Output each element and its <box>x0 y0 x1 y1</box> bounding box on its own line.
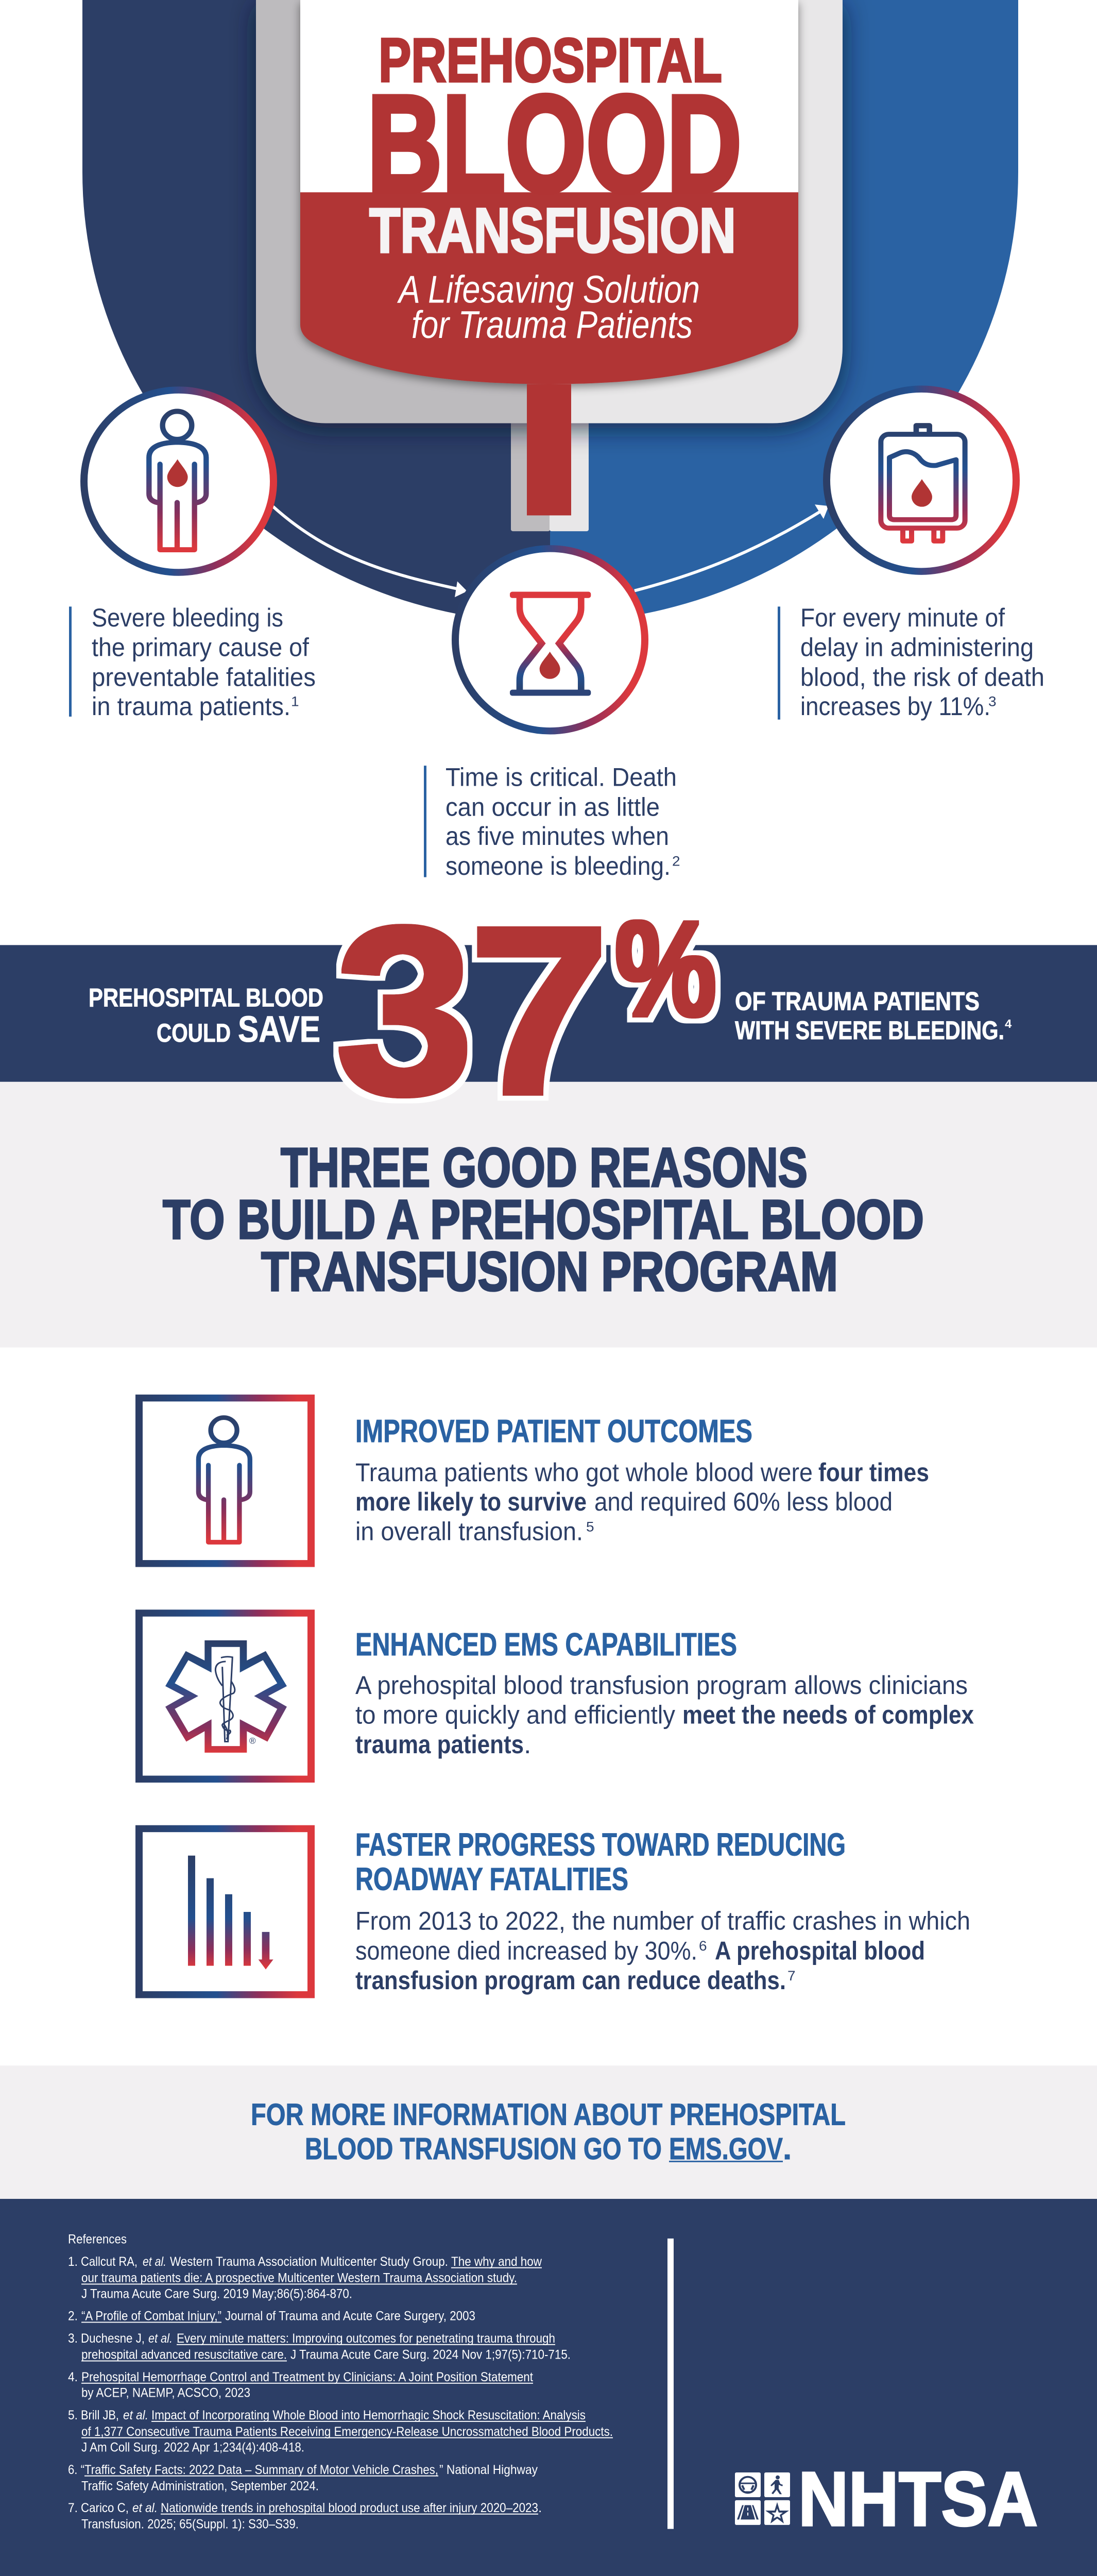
fact: time is critical: as five minutes when <box>445 822 669 851</box>
title: for Trauma Patients <box>412 303 693 347</box>
logo wordmark: NHTSA <box>798 2456 1038 2542</box>
stat lead-in: COULD <box>157 1019 231 1047</box>
fact: minute of delay: blood, the risk of death <box>800 663 1044 691</box>
reason 2: enhanced EMS capabilities <box>139 1613 974 1779</box>
logo icon: road <box>737 2505 759 2519</box>
circle icon: blood bag <box>827 389 1016 571</box>
stat banner <box>0 876 1097 1347</box>
references: et al. <box>143 2255 166 2269</box>
logo icon: pedestrian <box>770 2476 783 2494</box>
references: 1. <box>68 2255 78 2269</box>
references: by ACEP, NAEMP, ACSCO, 2023 <box>81 2386 250 2400</box>
reason 3: reducing roadway fatalities <box>139 1826 970 1995</box>
reason text: to more quickly and efficiently <box>355 1700 675 1729</box>
stat lead-in: PREHOSPITAL BLOOD <box>89 984 323 1012</box>
bag body <box>256 0 843 423</box>
icon box: star of life <box>139 1613 311 1779</box>
references: J Trauma Acute Care Surg. 2024 Nov 1;97(5):710-715. <box>290 2348 571 2362</box>
stat tail <box>735 987 1012 1045</box>
call to action band <box>0 2065 1097 2199</box>
references: J Am Coll Surg. 2022 Apr 1;234(4):408-418. <box>81 2441 304 2454</box>
reason text: FASTER PROGRESS TOWARD REDUCING <box>355 1826 846 1862</box>
references: 2. <box>68 2309 78 2324</box>
stat tail: WITH SEVERE BLEEDING. <box>735 1016 1004 1045</box>
title: PREHOSPITAL <box>379 26 722 95</box>
references: 4. <box>68 2370 78 2384</box>
reason text: ENHANCED EMS CAPABILITIES <box>355 1626 737 1662</box>
title: BLOOD <box>367 66 742 221</box>
reason text: and required 60% less blood <box>594 1487 893 1516</box>
references: Duchesne J, <box>81 2331 145 2346</box>
reason text <box>355 1413 929 1546</box>
fact: severe bleeding: 1 <box>291 693 299 709</box>
reason text: four times <box>818 1458 929 1487</box>
icon box: star of life: ® <box>249 1736 256 1746</box>
logo icon: steering wheel <box>740 2477 756 2493</box>
references: The why and how <box>451 2255 542 2269</box>
references: et al. <box>123 2408 148 2422</box>
references: Nationwide trends in prehospital blood product use after injury 2020–2023 <box>161 2501 538 2515</box>
references: ” National Highway <box>439 2463 538 2477</box>
reason text: . <box>524 1730 531 1759</box>
stat: 37 percent: 3 <box>335 876 474 1145</box>
stat tail: 4 <box>1005 1017 1012 1030</box>
reason text: ROADWAY FATALITIES <box>355 1861 628 1897</box>
reason text: IMPROVED PATIENT OUTCOMES <box>355 1413 752 1449</box>
icon box: declining bars <box>139 1828 311 1995</box>
reason text: 5 <box>586 1519 594 1534</box>
fact: time is critical: can occur in as little <box>445 792 660 821</box>
references: Prehospital Hemorrhage Control and Treatment by Clinicians: A Joint Position Statement <box>81 2370 533 2384</box>
references: 7. <box>68 2501 78 2515</box>
fact: time is critical: 2 <box>672 853 680 869</box>
references: Journal of Trauma and Acute Care Surgery, 2003 <box>225 2309 475 2324</box>
stat tail: OF TRAUMA PATIENTS <box>735 987 980 1015</box>
bag connector <box>511 421 589 531</box>
references: References <box>68 2232 127 2246</box>
arrow: left circle to hourglass <box>273 506 467 597</box>
reason text <box>355 1626 974 1759</box>
fact: time is critical: Time is critical. Death <box>445 762 677 791</box>
section heading: THREE GOOD REASONS <box>281 1137 808 1198</box>
references <box>68 2232 613 2532</box>
fact: severe bleeding: preventable fatalities <box>92 663 316 691</box>
call to action band: EMS.GOV <box>669 2131 783 2166</box>
fact: minute of delay: For every minute of <box>800 603 1005 632</box>
reason text: in overall transfusion. <box>355 1517 583 1546</box>
references: J Trauma Acute Care Surg. 2019 May;86(5):864-870. <box>81 2287 352 2301</box>
reason text: someone died increased by 30%. <box>355 1936 697 1965</box>
references: et al. <box>132 2501 158 2515</box>
reason text: From 2013 to 2022, the number of traffic crashes in which <box>355 1907 970 1935</box>
stat lead-in <box>89 984 323 1050</box>
reason text: A prehospital blood <box>715 1936 925 1965</box>
section heading: TRANSFUSION PROGRAM <box>261 1241 838 1302</box>
call to action band: FOR MORE INFORMATION ABOUT PREHOSPITAL <box>251 2097 846 2131</box>
fact: severe bleeding: in trauma patients. <box>92 692 290 721</box>
fact: time is critical <box>424 762 680 880</box>
call to action band: . <box>783 2131 792 2166</box>
call to action band: BLOOD TRANSFUSION GO TO <box>305 2131 662 2166</box>
references: of 1,377 Consecutive Trauma Patients Receiving Emergency-Release Uncrossmatched Blood Products. <box>81 2425 613 2439</box>
circle icon: hourglass <box>455 549 645 731</box>
section heading <box>163 1137 924 1302</box>
references: et al. <box>148 2331 173 2346</box>
references: Callcut RA, <box>81 2255 138 2269</box>
rounded backdrop: navy and blue halves <box>82 0 1018 623</box>
reason text: transfusion program can reduce deaths. <box>355 1966 786 1995</box>
fact: minute of delay: delay in administering <box>800 633 1034 662</box>
arrow: hourglass to right circle <box>635 504 829 591</box>
references: . <box>538 2501 542 2515</box>
stat: 37 percent <box>335 876 716 1145</box>
fact: severe bleeding: Severe bleeding is <box>92 603 283 632</box>
references: “A Profile of Combat Injury,” <box>81 2309 221 2324</box>
stat: 37 percent: % <box>615 893 716 1044</box>
fact: minute of delay: increases by 11%. <box>800 692 990 721</box>
title <box>367 26 742 347</box>
icon box: person <box>139 1398 311 1564</box>
title: A Lifesaving Solution <box>397 268 700 311</box>
references: Every minute matters: Improving outcomes for penetrating trauma through <box>177 2331 555 2346</box>
fact: severe bleeding <box>69 603 316 721</box>
fact: severe bleeding: the primary cause of <box>92 633 310 662</box>
reason text: trauma patients <box>355 1730 524 1759</box>
fact: minute of delay: 3 <box>988 693 997 709</box>
reason text: A prehospital blood transfusion program allows clinicians <box>355 1671 968 1700</box>
references: 6. “ <box>68 2463 84 2477</box>
references: 5. <box>68 2408 78 2422</box>
blood bag <box>256 0 843 531</box>
bag label panel <box>300 0 798 384</box>
title: TRANSFUSION <box>369 196 736 266</box>
stat: 37 percent: 7 <box>468 876 610 1145</box>
references: Transfusion. 2025; 65(Suppl. 1): S30–S39. <box>81 2517 299 2532</box>
logo icon: star <box>765 2502 789 2523</box>
references: Carico C, <box>81 2501 129 2515</box>
reason text: 7 <box>787 1968 796 1984</box>
reason text: 6 <box>699 1938 707 1954</box>
reason text: more likely to survive <box>355 1487 587 1516</box>
reason 1: improved patient outcomes <box>139 1398 929 1564</box>
references: Western Trauma Association Multicenter Study Group. <box>170 2255 448 2269</box>
fact: minute of delay <box>778 603 1044 721</box>
references: Brill JB, <box>81 2408 119 2422</box>
references: Traffic Safety Administration, September 2024. <box>81 2479 319 2493</box>
fact: time is critical: someone is bleeding. <box>445 852 671 880</box>
footer panel <box>0 2199 1097 2576</box>
references: 3. <box>68 2331 78 2346</box>
tube <box>527 384 571 515</box>
circle icon: person with blood drop <box>84 390 273 572</box>
references: our trauma patients die: A prospective Multicenter Western Trauma Association study. <box>81 2271 517 2285</box>
references: prehospital advanced resuscitative care. <box>81 2348 287 2362</box>
references: Impact of Incorporating Whole Blood into Hemorrhagic Shock Resuscitation: Analysis <box>151 2408 586 2422</box>
reason text <box>355 1826 970 1995</box>
references: Traffic Safety Facts: 2022 Data – Summary of Motor Vehicle Crashes, <box>84 2463 438 2477</box>
reason text: meet the needs of complex <box>682 1700 974 1729</box>
stat lead-in: SAVE <box>238 1009 320 1050</box>
reason text: Trauma patients who got whole blood were <box>355 1458 813 1487</box>
NHTSA logo <box>735 2456 1038 2542</box>
